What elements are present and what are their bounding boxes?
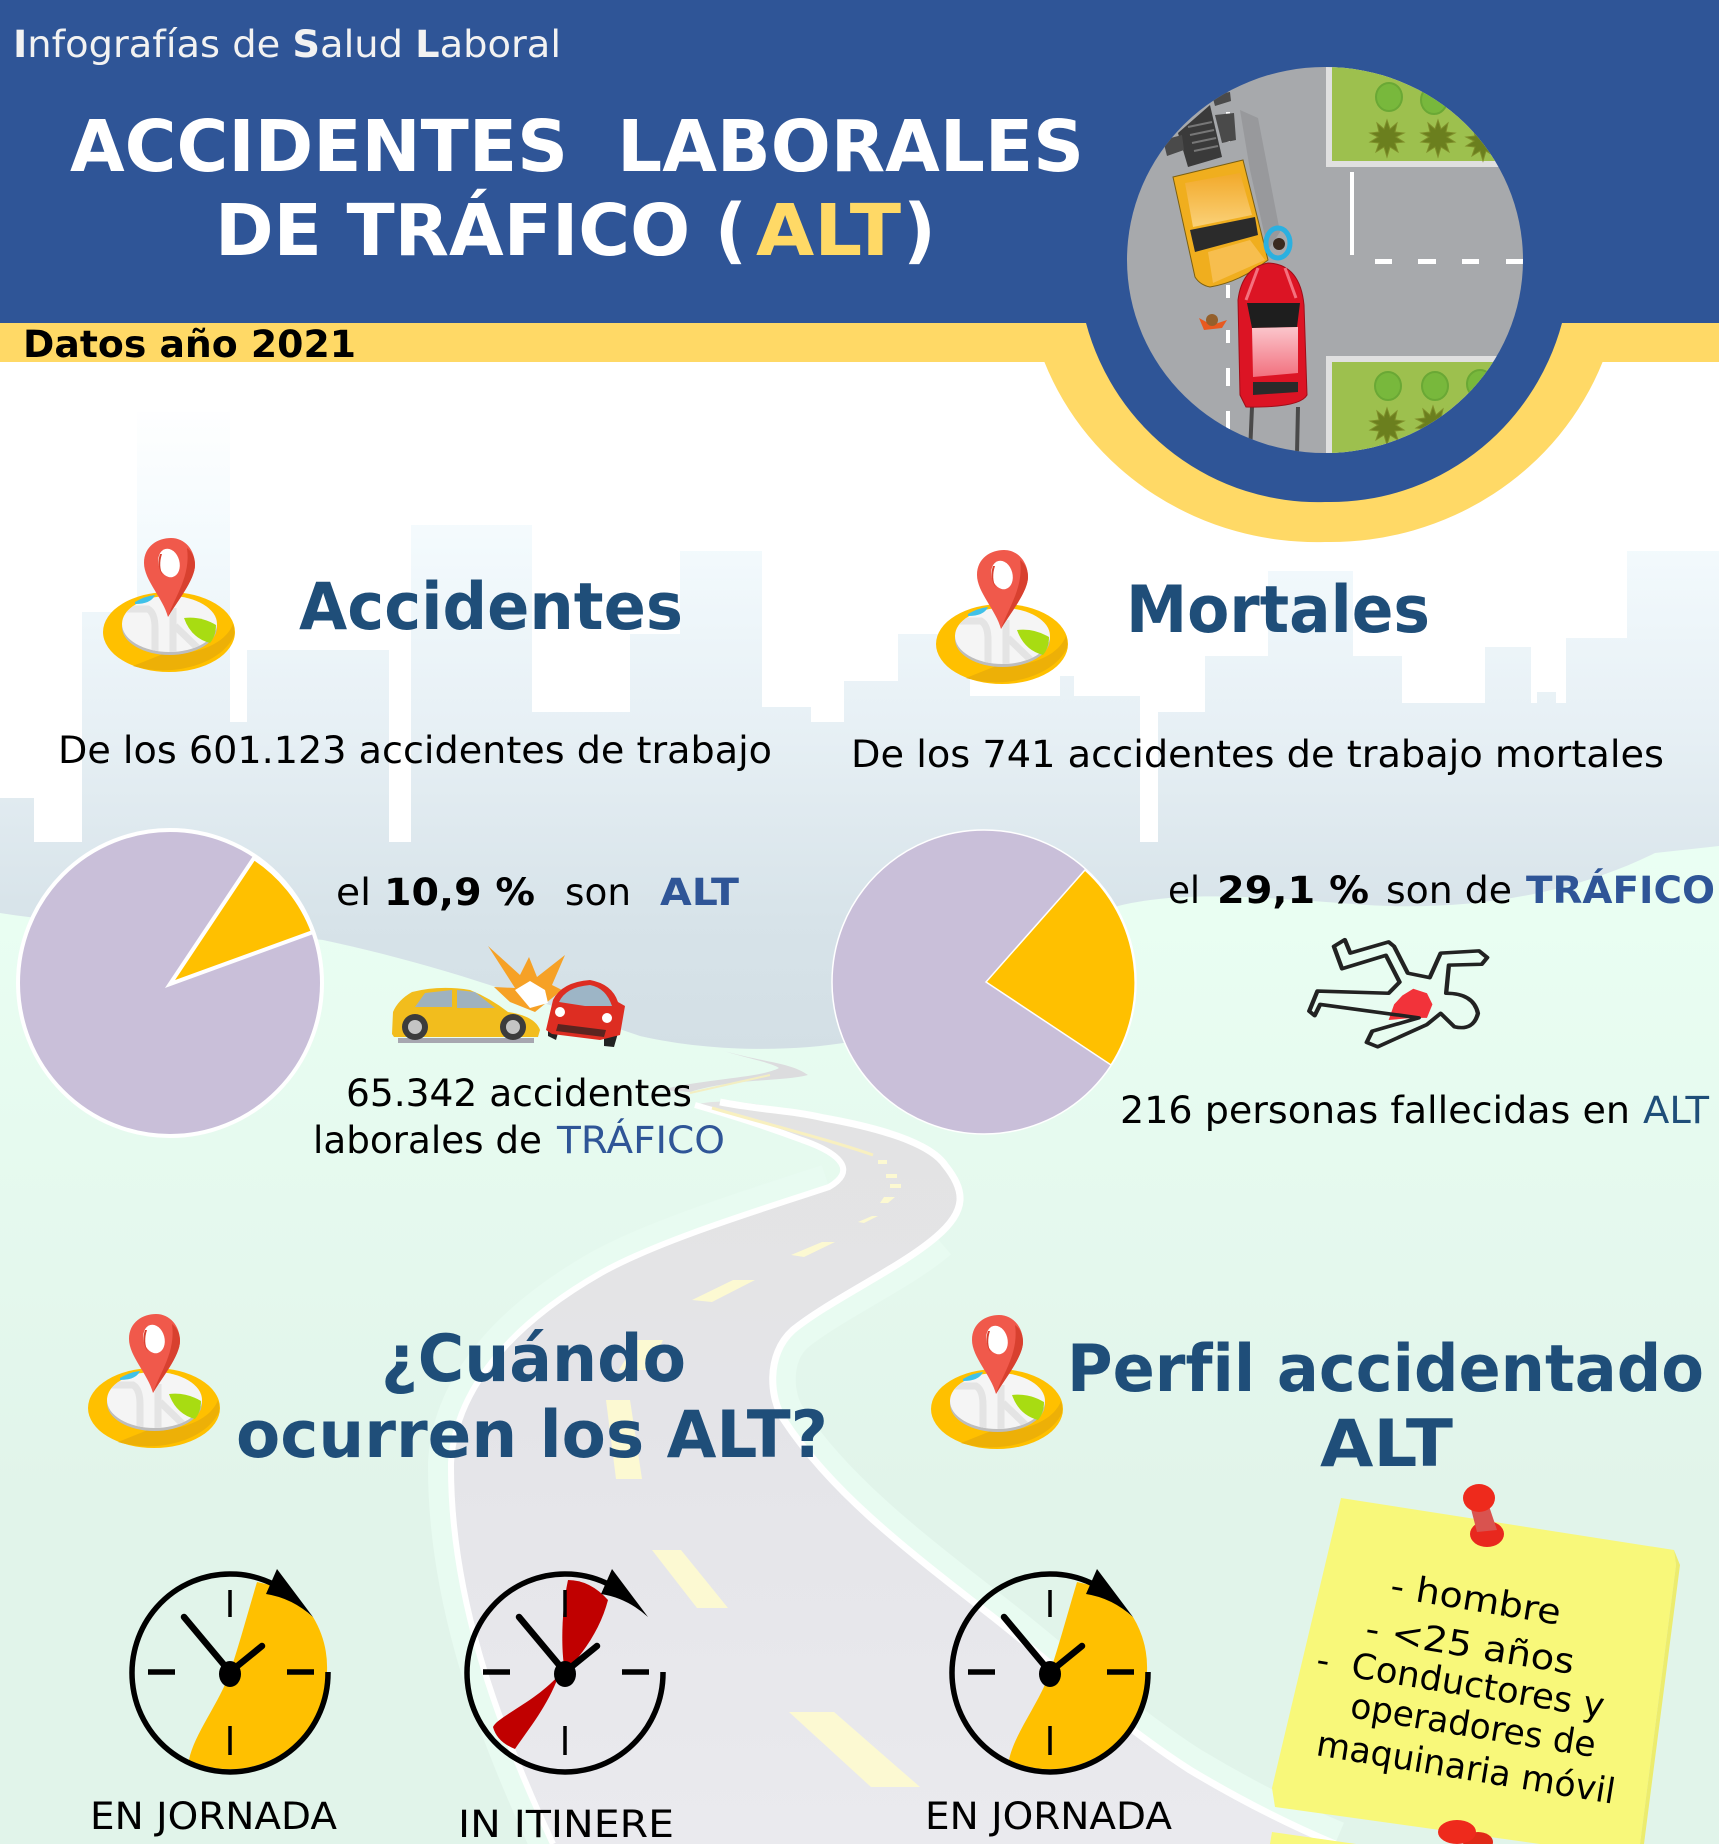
text: 65.342 accidents: 65.342 accidentes	[346, 1072, 692, 1115]
heading: when	[88, 1314, 828, 1473]
callout: 29,1 %	[1168, 868, 1715, 912]
callout: 29,1 %: son de	[1386, 869, 1512, 912]
heading: profile	[931, 1315, 1704, 1482]
text: total fatal accidents: De los 741 accidentes de trabajo mortales	[851, 733, 1664, 776]
note text: maquinaria móvil	[1314, 1724, 1618, 1813]
road lines	[1350, 172, 1354, 255]
note text: - hombre	[1388, 1566, 1564, 1634]
red car	[1238, 263, 1307, 407]
label: en jornada profile: EN JORNADA	[925, 1795, 1172, 1838]
heading: Accidentes	[103, 538, 683, 672]
heading: profile: Perfil accidentado	[1067, 1332, 1704, 1407]
skid marks	[1250, 407, 1298, 453]
data year: Datos año 2021	[23, 323, 356, 366]
far road	[660, 1050, 808, 1092]
icon: body chalk outline	[1309, 940, 1487, 1047]
text: 216 deaths: ALT	[1643, 1089, 1709, 1132]
road shoulders	[451, 1187, 829, 1844]
pin	[1463, 1484, 1504, 1547]
callout: 10,9 %: 10,9 %	[384, 871, 535, 914]
clock: in itinere	[467, 1569, 663, 1772]
callout: 29,1 %: el	[1168, 869, 1200, 912]
cyclist	[1266, 228, 1290, 258]
crash scene illustration	[1120, 60, 1530, 460]
second note	[1270, 1832, 1356, 1844]
icon: location pin	[88, 1314, 220, 1448]
yellow band	[0, 323, 1719, 362]
text: 65.342 accidents	[313, 1072, 725, 1162]
green hills	[0, 846, 1719, 1844]
text: 216 deaths: 216 personas fallecidas en	[1120, 1089, 1630, 1132]
pie chart: accidents	[18, 830, 322, 1136]
sticky note	[1270, 1484, 1680, 1844]
pie chart: fatal accidents	[832, 830, 1136, 1134]
heading: when: ocurren los ALT?	[236, 1398, 828, 1473]
skyline	[0, 412, 1719, 1065]
callout: 10,9 %: el	[336, 871, 371, 914]
header label: Infografías de Salud Laboral	[13, 23, 561, 66]
text: 65.342 accidents: TRÁFICO	[556, 1118, 725, 1162]
title: DE TRÁFICO (	[215, 189, 747, 272]
title: )	[903, 189, 936, 272]
lower pin	[1438, 1820, 1493, 1844]
green blocks	[1326, 67, 1498, 167]
heading: Mortales	[936, 550, 1430, 684]
heading: when: ¿Cuándo	[381, 1322, 686, 1397]
heading: profile: ALT	[1320, 1407, 1453, 1482]
note text: operadores de	[1348, 1686, 1599, 1766]
callout: 29,1 %: TRÁFICO	[1526, 868, 1715, 912]
blue arc	[1086, 323, 1562, 502]
road surface	[451, 1102, 1335, 1844]
road centre markings	[606, 1108, 920, 1787]
icon: location pin	[936, 550, 1068, 684]
note text: - Conductores y	[1314, 1640, 1607, 1727]
clock: en jornada profile	[952, 1569, 1148, 1772]
trees	[1375, 83, 1493, 400]
icon: car crash	[392, 946, 625, 1047]
heading: Accidentes: Accidentes	[299, 570, 683, 645]
road edges	[451, 1105, 843, 1844]
icon: location pin	[103, 538, 235, 672]
icon: location pin	[931, 1315, 1063, 1449]
callout: 29,1 %: 29,1 %	[1217, 869, 1369, 912]
pedestrian on the road	[1199, 314, 1227, 330]
title: ALT	[756, 189, 902, 272]
note text	[1314, 1566, 1618, 1813]
callout: 10,9 %	[336, 871, 740, 914]
heading: Mortales: Mortales	[1126, 573, 1430, 648]
clock: en jornada	[132, 1569, 328, 1772]
yellow vehicle	[1163, 92, 1280, 287]
header banner	[0, 0, 1719, 542]
title	[70, 105, 1084, 272]
text: total accidents: De los 601.123 accidentes de trabajo	[58, 729, 772, 772]
callout: 10,9 %: ALT	[660, 871, 740, 914]
yellow arc behind the scene	[1044, 323, 1603, 542]
title: ACCIDENTES LABORALES	[70, 105, 1084, 188]
note text: - <25 años	[1363, 1609, 1577, 1683]
label: en jornada: EN JORNADA	[90, 1795, 337, 1838]
callout: 10,9 %: son	[565, 871, 631, 914]
text: 65.342 accidents: laborales de	[313, 1119, 542, 1162]
